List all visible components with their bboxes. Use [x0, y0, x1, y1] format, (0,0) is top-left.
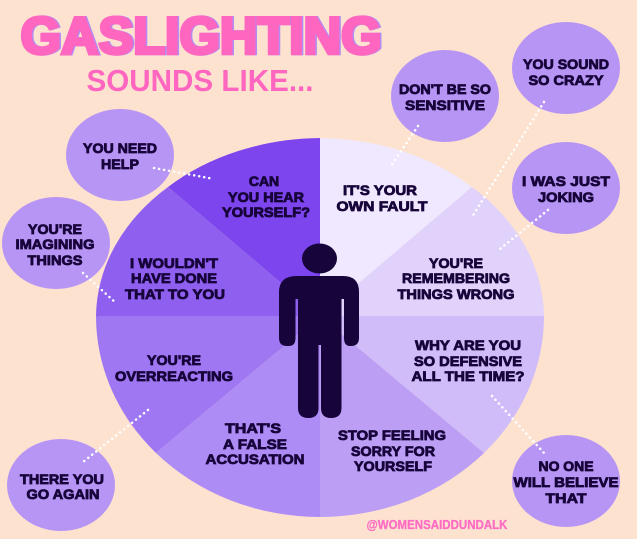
label: that's a false accusation	[206, 420, 304, 467]
label: i wouldn't have done that to you: THAT TO YOU	[125, 286, 225, 302]
text: don't be so sensitive: SENSITIVE	[405, 97, 485, 113]
label: it's your own fault	[336, 182, 428, 214]
text: there you go again: THERE YOU	[20, 471, 104, 487]
bubble: there you go again	[7, 439, 115, 531]
connector: joking	[500, 210, 548, 249]
label: i wouldn't have done that to you: I WOULDN'T	[130, 255, 218, 271]
connector: go again	[83, 410, 148, 462]
text: i was just joking	[522, 173, 610, 205]
text: there you go again: GO AGAIN	[26, 486, 100, 502]
text: you need help	[83, 140, 157, 172]
label: it's your own fault: OWN FAULT	[336, 198, 428, 214]
bubble: no one will believe that	[512, 435, 620, 527]
text: you sound so crazy: YOU SOUND	[523, 56, 609, 72]
bubble: you need help	[66, 109, 174, 201]
bubble: you sound so crazy	[512, 22, 620, 114]
text: you sound so crazy: SO CRAZY	[528, 72, 604, 88]
text: i was just joking: I WAS JUST	[522, 173, 610, 189]
label: you're remembering things wrong: REMEMBERING	[402, 270, 510, 286]
label: stop feeling sorry: STOP FEELING	[338, 427, 446, 443]
text: i was just joking: JOKING	[538, 189, 594, 205]
label: you're remembering things wrong: YOU'RE	[429, 255, 483, 271]
label: can you hear yourself	[222, 173, 310, 220]
text: you need help: HELP	[101, 156, 139, 172]
label: that's a false accusation: ACCUSATION	[206, 451, 304, 467]
label: why are you so defensive: WHY ARE YOU	[415, 337, 521, 353]
figure	[279, 244, 359, 418]
title: GASLIGHTING	[20, 8, 382, 66]
connector: crazy	[472, 102, 544, 217]
label: stop feeling sorry	[338, 427, 446, 474]
label: you're remembering things wrong	[398, 255, 515, 302]
label: stop feeling sorry: YOURSELF	[354, 458, 432, 474]
label: stop feeling sorry: SORRY FOR	[351, 443, 435, 459]
text: no one will believe that: WILL BELIEVE	[514, 474, 618, 490]
text: you're imagining things: THINGS	[28, 252, 82, 268]
connector: sensitive	[391, 126, 418, 166]
text: don't be so sensitive: DON'T BE SO	[399, 81, 491, 97]
label: you're remembering things wrong: THINGS WRONG	[398, 286, 515, 302]
label: you're overreacting	[115, 352, 233, 384]
text: you sound so crazy	[523, 56, 609, 88]
label: that's a false accusation: THAT'S	[225, 420, 281, 436]
text: you're imagining things	[16, 221, 95, 268]
text: no one will believe that: NO ONE	[538, 458, 594, 474]
text: there you go again	[20, 471, 104, 502]
label: you're overreacting: OVERREACTING	[115, 368, 233, 384]
bubble: you're imagining things	[2, 197, 110, 289]
title: GASLIGHTING	[22, 8, 383, 66]
pie chart	[96, 138, 544, 517]
bubble: i was just joking	[512, 142, 620, 234]
label: that's a false accusation: A FALSE	[223, 436, 287, 452]
connector: you need help	[154, 168, 214, 179]
label: you're overreacting: YOU'RE	[147, 352, 201, 368]
connector: no one	[492, 396, 544, 453]
subtitle: SOUNDS LIKE...	[86, 63, 314, 98]
label: why are you so defensive: SO DEFENSIVE	[414, 353, 522, 369]
bubble: don't be so sensitive	[391, 50, 499, 142]
label: why are you so defensive: ALL THE TIME?	[412, 368, 524, 384]
label: can you hear yourself: YOURSELF?	[222, 204, 310, 220]
text: you're imagining things: YOU'RE	[28, 221, 82, 237]
text: you need help: YOU NEED	[83, 140, 157, 156]
label: i wouldn't have done that to you	[125, 255, 225, 302]
text: you're imagining things: IMAGINING	[16, 236, 95, 252]
connector: imagining	[83, 273, 116, 303]
text: no one will believe that: THAT	[546, 490, 587, 506]
label: i wouldn't have done that to you: HAVE DONE	[131, 270, 217, 286]
text: no one will believe that	[514, 458, 618, 506]
label: it's your own fault: IT'S YOUR	[343, 182, 417, 198]
label: can you hear yourself: CAN	[249, 173, 279, 189]
text: don't be so sensitive	[399, 81, 491, 113]
handle: @WOMENSAIDDUNDALK	[366, 518, 508, 532]
label: can you hear yourself: YOU HEAR	[228, 189, 304, 205]
label: why are you so defensive	[412, 337, 524, 384]
